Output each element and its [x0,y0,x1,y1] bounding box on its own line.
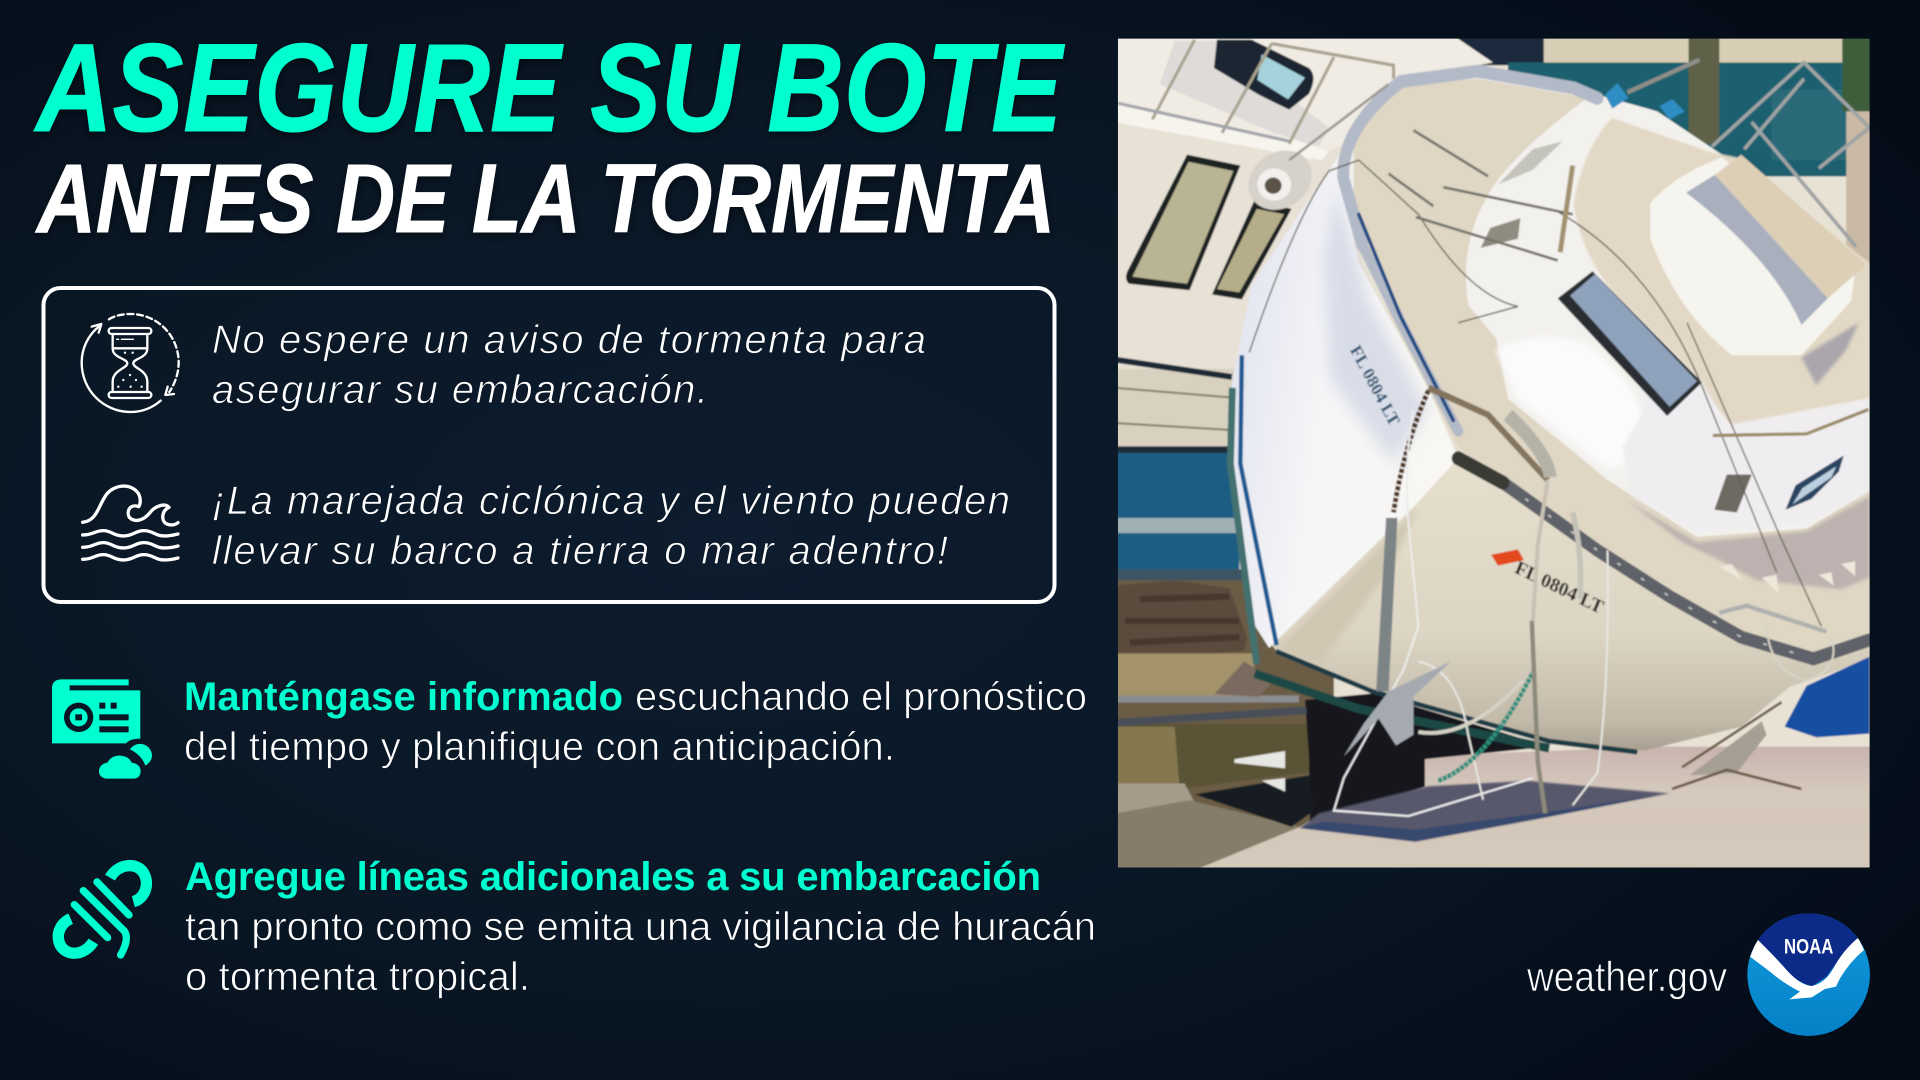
soft white blob [1496,337,1642,469]
text: agregue lineas: Agregue líneas adicionales a su embarcación [185,855,1041,899]
icon: waves [83,486,178,560]
icon: hourglass with circular arrows [82,314,179,412]
puddle [1115,800,1300,870]
railing stanchions right [1712,63,1870,247]
hull registration sticker and number: FL 0804 LT [1512,557,1607,619]
logo wing [1750,938,1864,999]
panel border [44,288,1054,602]
NOAA logo [1747,913,1871,1037]
toe rail [1343,71,1870,659]
background buildings [1458,35,1874,263]
dark water under hull [1195,694,1549,827]
blue fittings [1605,83,1685,119]
text: asegurar: asegurar su embarcación. [212,368,708,412]
ground: sand [1195,747,1874,870]
hull registration sticker and number [1491,549,1607,619]
icon: radio and cloud [52,679,152,779]
text: escuchando: escuchando el pronóstico [635,675,1087,719]
hull stripes [1276,651,1637,752]
text: o tormenta tropical: o tormenta tropical. [185,955,530,999]
metal poles [1118,694,1300,704]
text: del tiempo: del tiempo y planifique con anticipación. [184,725,895,769]
logo sky [1751,914,1862,986]
text: llevar: llevar su barco a tierra o mar adentro! [212,529,948,573]
hull registration port: FL 0804 LT [1346,341,1404,430]
raised deck box [1650,157,1856,355]
deck white base [1349,78,1869,537]
logo wordmark: NOAA [1784,934,1833,958]
cream side deck [1354,79,1870,653]
section: stay informed [52,675,1087,779]
fender [1248,83,1390,212]
text: la marejada: ¡La marejada ciclónica y el viento pueden [212,479,1010,523]
boat shadow on sand [1300,781,1669,842]
icon: rope [58,866,146,955]
text: tan pronto: tan pronto como se emita una vigilancia de huracán [185,905,1096,949]
ground: mud and grass [1115,580,1344,830]
chain and lines [1249,130,1869,816]
title [33,19,1065,253]
section: add lines [58,855,1096,999]
text: no espere: No espere un aviso de tormenta para [212,318,926,362]
cream cabin top [1574,118,1870,426]
weather.gov: weather.gov [1526,953,1727,1000]
port lights [1481,141,1844,512]
left motor boat [1115,35,1493,586]
port hull side [1229,152,1458,648]
lower hull [1269,458,1870,750]
title line 2: ANTES DE LA TORMENTA [35,144,1055,253]
text: mantengase informado: Manténgase informado [184,675,623,719]
hatch [1558,271,1702,416]
panel: warning box [44,288,1054,602]
photo: beached sailboat [1115,35,1874,870]
cabin shadow on deck [1627,496,1870,589]
logo water [1747,913,1871,1037]
title line 1: ASEGURE SU BOTE [33,19,1065,158]
anchor and post [1344,518,1545,813]
blue tarp and debris [1672,657,1870,789]
